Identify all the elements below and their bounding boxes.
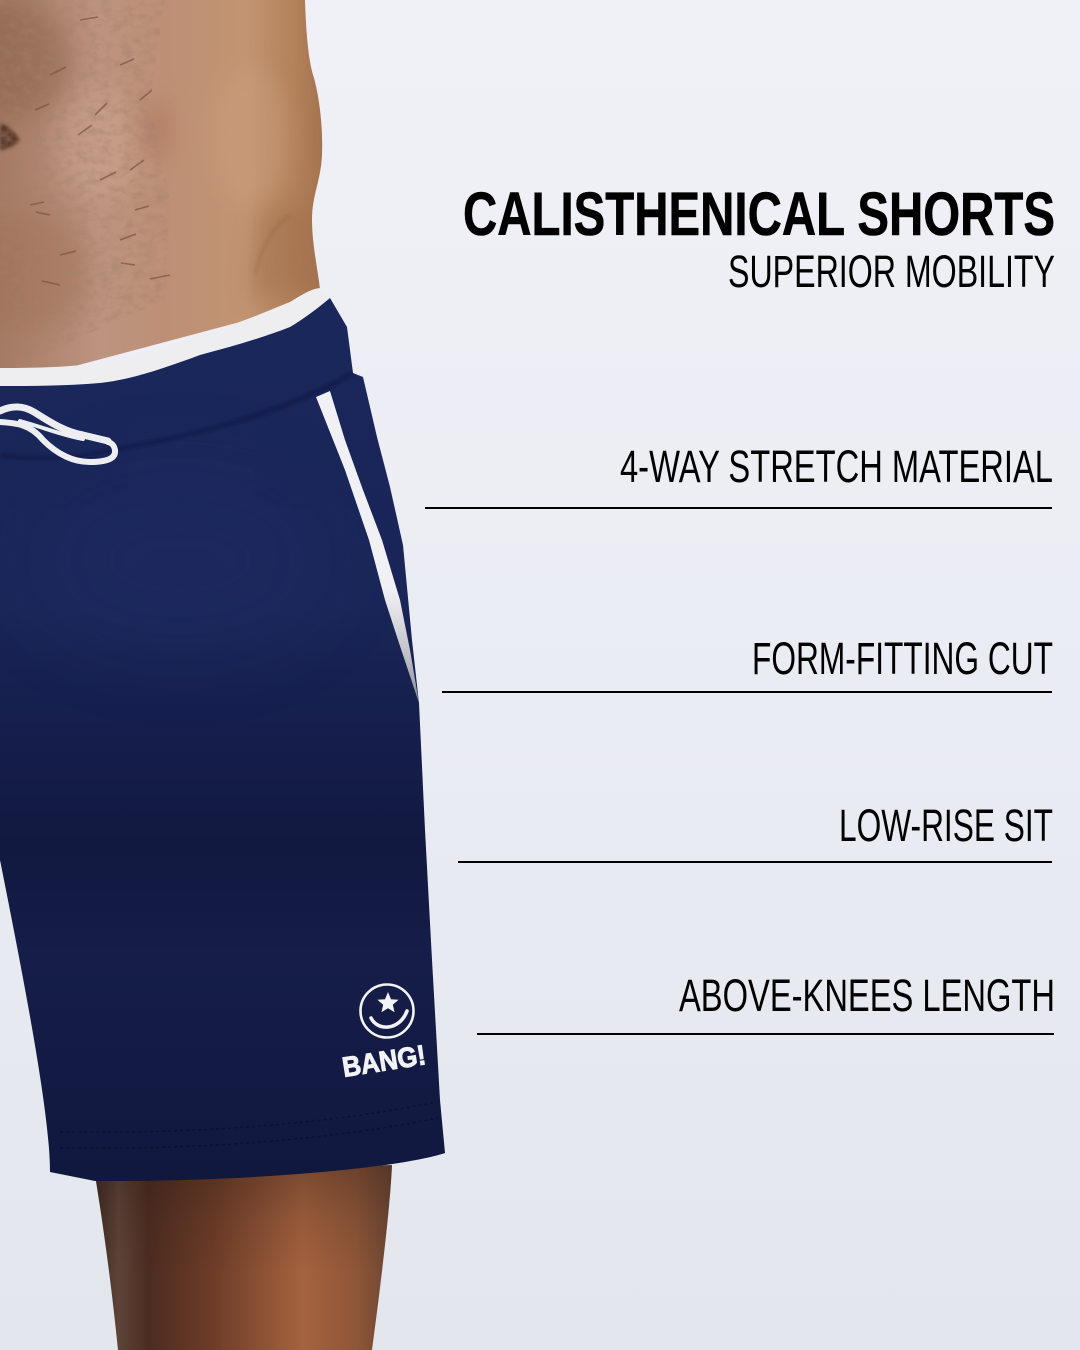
side pocket stripe	[316, 391, 419, 703]
white waistband piping	[0, 288, 330, 386]
torso	[0, 0, 330, 386]
logo: BANG!	[340, 984, 428, 1083]
drawcord	[0, 407, 115, 462]
hem stitching	[60, 1118, 438, 1148]
waistband seam	[117, 373, 353, 449]
leg	[95, 1165, 392, 1350]
navel	[0, 122, 20, 150]
logo wordmark: BANG!	[340, 1039, 428, 1083]
navy shorts	[0, 298, 445, 1181]
logo circle and smile	[360, 984, 414, 1038]
